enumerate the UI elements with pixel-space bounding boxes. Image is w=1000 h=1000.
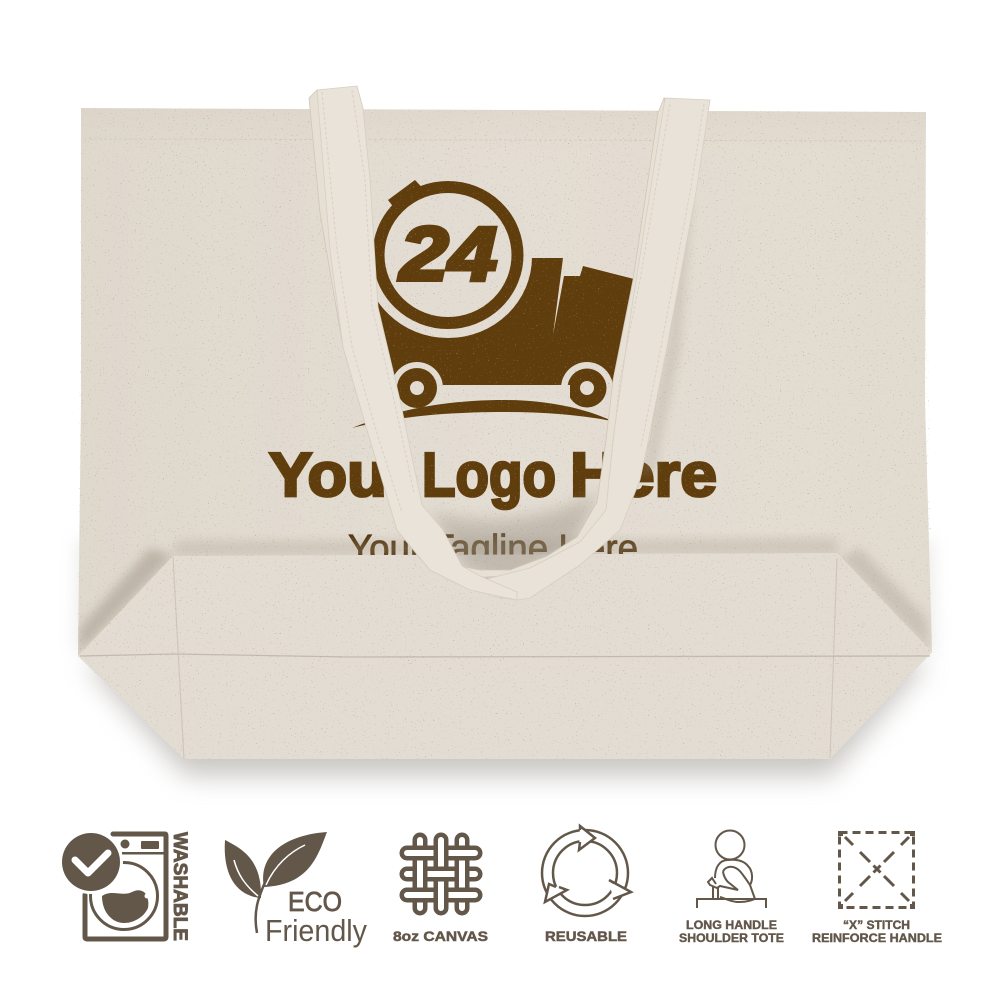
left handle front strap: [317, 86, 517, 600]
stitched square: [840, 832, 914, 908]
right leaf: [263, 832, 327, 887]
clock ring: [378, 187, 518, 323]
fabric speckle: [76, 100, 936, 762]
tote label: [679, 920, 784, 945]
stitch label: [812, 920, 942, 945]
faint side shadow: [74, 540, 936, 650]
clock gap: [378, 258, 532, 338]
handles: [309, 86, 710, 600]
tote label: LONG HANDLE: [686, 920, 777, 932]
bag drop shadow: [86, 640, 928, 776]
icon: long handle tote: [679, 830, 784, 945]
left corner shadow band: [78, 548, 173, 654]
friendly word: Friendly: [265, 913, 367, 948]
icon: x stitch: [812, 831, 942, 945]
bag front panel: [78, 108, 932, 759]
leaf veins: [234, 845, 305, 896]
reusable label: REUSABLE: [545, 928, 627, 944]
left leaf: [225, 840, 261, 898]
shadow above base fold: [175, 538, 838, 556]
stem: [256, 880, 266, 933]
washer frame: [85, 834, 166, 939]
tote label: SHOULDER TOTE: [679, 933, 784, 945]
head: [716, 830, 744, 860]
logo name: Your: [269, 441, 412, 510]
icon: washable: [59, 830, 190, 941]
icon: 8oz canvas: [393, 840, 488, 944]
check badge: [59, 830, 123, 894]
infographic canvas: [62, 86, 942, 948]
weave: [407, 840, 475, 908]
top arrowhead: [579, 826, 595, 850]
left wheel: [394, 362, 443, 408]
logo name: [268, 452, 716, 510]
icon: reusable: [542, 826, 631, 944]
arm: [708, 867, 750, 890]
washer controls: [120, 840, 166, 854]
shoulders and bag outline: [715, 860, 755, 902]
right handle rear strap: [460, 98, 690, 578]
handle cast shadow: [640, 200, 692, 480]
clock knob: [388, 180, 420, 206]
icon row: [59, 826, 942, 948]
stitch label: “X” STITCH: [843, 920, 910, 932]
top hem stitching: [84, 139, 924, 141]
right handle front strap: [475, 98, 710, 600]
left arrowhead: [545, 884, 567, 902]
tote bag: [76, 100, 936, 762]
printed logo: [269, 176, 717, 570]
corner blocks: [838, 831, 915, 909]
top hem band: [81, 108, 926, 150]
handle stitching: [322, 90, 704, 512]
logo name: Here: [570, 441, 717, 510]
right wheel: [561, 362, 612, 408]
logo name: Logo: [422, 441, 556, 510]
left handle rear strap: [309, 90, 460, 585]
table: [697, 899, 766, 908]
shadow inside handle loop: [430, 490, 600, 585]
right arrowhead: [609, 880, 631, 899]
base flap: [78, 553, 932, 759]
right corner shadow band: [840, 548, 930, 650]
truck body: [378, 258, 640, 385]
base crease lines: [173, 557, 837, 759]
clock number: 24: [398, 212, 497, 297]
road swoosh: [352, 400, 612, 428]
stitch label: REINFORCE HANDLE: [812, 933, 942, 945]
cargo underside gap: [568, 385, 570, 398]
icon: eco friendly: [225, 832, 367, 948]
stitched cross: [845, 837, 909, 901]
base fold line: [80, 654, 930, 657]
tagline: Your Tagline Here: [348, 528, 638, 570]
washer drum: [90, 862, 158, 930]
washable label: WASHABLE: [169, 832, 190, 941]
eco word: ECO: [288, 886, 342, 917]
canvas label: 8oz CANVAS: [393, 928, 488, 944]
recycle ring: [542, 830, 628, 916]
legs: [713, 887, 718, 899]
